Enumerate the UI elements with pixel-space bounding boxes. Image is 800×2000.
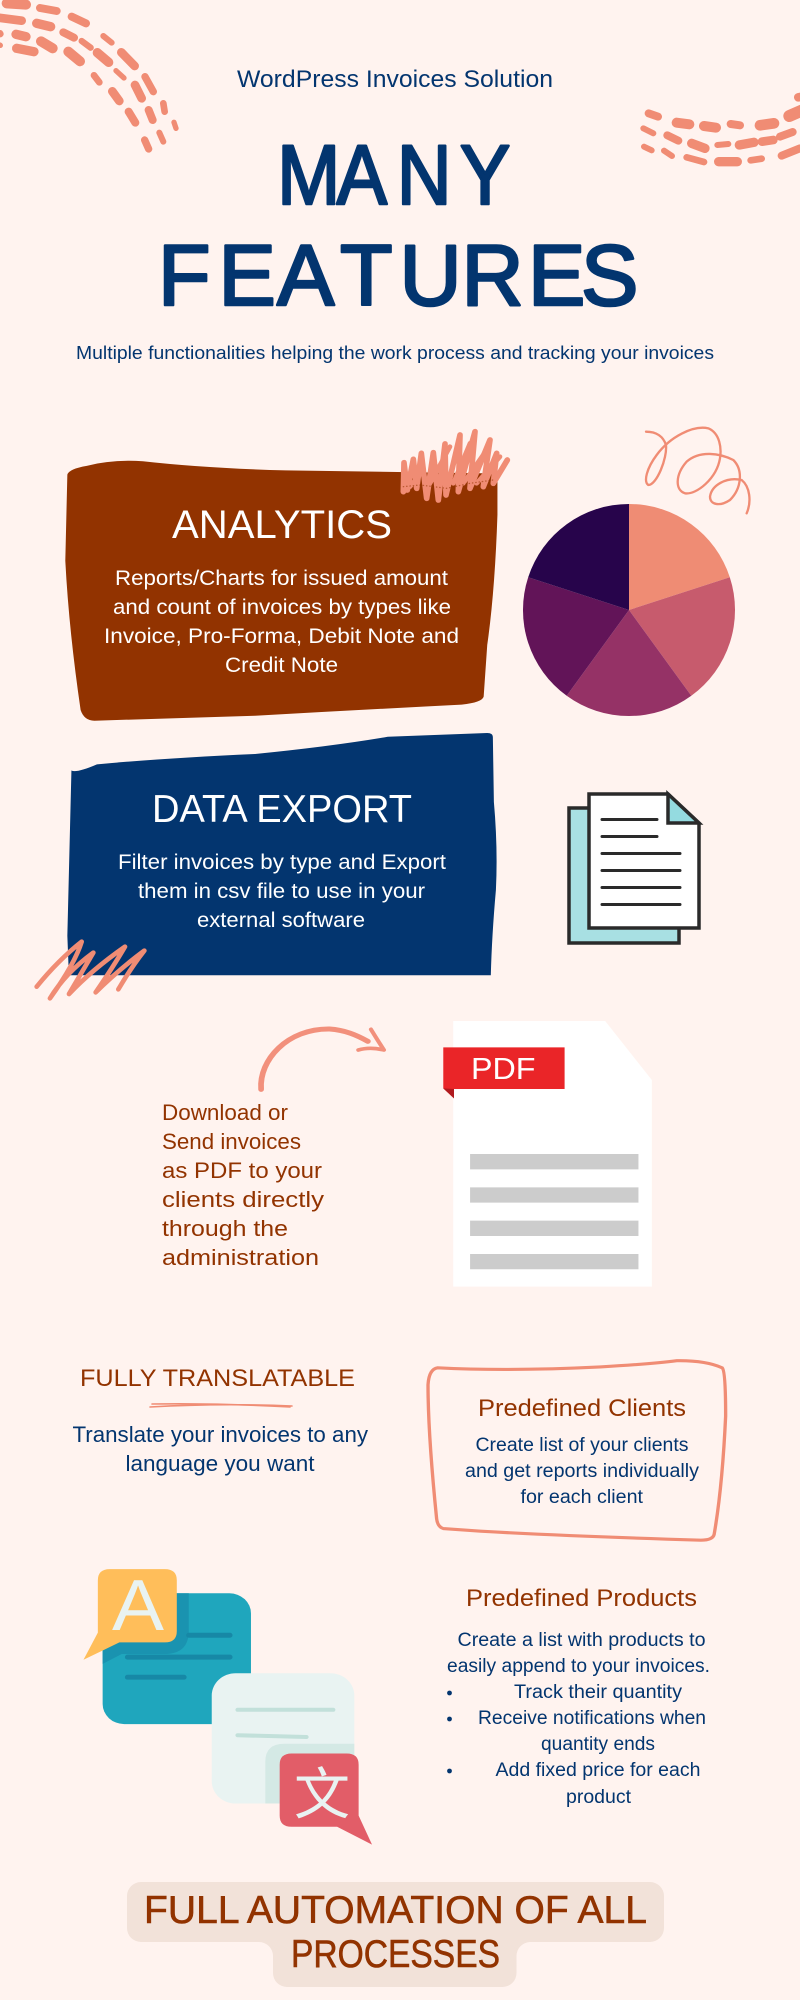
title line: MANY: MANY xyxy=(277,128,510,222)
data export description: external software xyxy=(197,909,365,932)
icon: translation chat bubbles xyxy=(83,1566,372,1845)
heading: fully translatable: FULLY TRANSLATABLE xyxy=(80,1365,355,1392)
heading: analytics: ANALYTICS xyxy=(172,503,392,547)
banner background xyxy=(127,1882,664,1987)
clients description: Create list of your clients xyxy=(476,1435,688,1456)
analytics description: Invoice, Pro-Forma, Debit Note and xyxy=(104,625,459,648)
pie chart xyxy=(523,504,735,716)
title line: FEATURES: FEATURES xyxy=(158,228,638,324)
banner text: FULL AUTOMATION OF ALL xyxy=(144,1889,647,1932)
data export description xyxy=(118,851,446,932)
products description: Receive notifications when xyxy=(478,1708,706,1729)
analytics description: Reports/Charts for issued amount xyxy=(115,567,448,590)
pdf description text xyxy=(162,1100,324,1270)
pdf description text: as PDF to your xyxy=(162,1158,322,1183)
data export description: Filter invoices by type and Export xyxy=(118,851,446,874)
clients outline xyxy=(428,1361,726,1540)
banner text xyxy=(144,1889,647,1976)
pdf description text: clients directly xyxy=(162,1187,324,1212)
subtitle: Multiple functionalities helping the work process and tracking your invoices xyxy=(76,343,714,363)
decoration: scribble on data export panel xyxy=(37,942,144,998)
analytics description: and count of invoices by types like xyxy=(113,596,451,619)
data export text xyxy=(118,788,446,932)
underline stroke xyxy=(150,1404,292,1407)
block: predefined products xyxy=(447,1585,710,1808)
heading: predefined clients: Predefined Clients xyxy=(478,1395,686,1422)
block: fully translatable xyxy=(72,1365,368,1476)
icon: PDF document xyxy=(443,1021,652,1287)
products description: product xyxy=(566,1787,632,1808)
heading: data export: DATA EXPORT xyxy=(152,788,412,831)
clients description: for each client xyxy=(520,1487,644,1508)
eyebrow heading: WordPress Invoices Solution xyxy=(237,66,553,93)
translatable description: Translate your invoices to any xyxy=(72,1422,368,1447)
letter A: A xyxy=(112,1566,164,1646)
arrow: to PDF xyxy=(261,1029,384,1089)
analytics description: Credit Note xyxy=(225,654,338,677)
pdf description text: Download or xyxy=(162,1100,288,1125)
analytics description xyxy=(104,567,459,677)
main title xyxy=(158,128,638,324)
clients description xyxy=(465,1435,700,1508)
data export description: them in csv file to use in your xyxy=(138,880,425,903)
products description: quantity ends xyxy=(541,1734,655,1755)
translatable description xyxy=(72,1422,368,1476)
panel: predefined clients xyxy=(428,1361,726,1540)
products description: Track their quantity xyxy=(514,1682,683,1703)
decoration: top-right dashes xyxy=(643,97,800,162)
decoration: scribble on analytics panel xyxy=(403,432,507,500)
panel: data export background xyxy=(67,733,497,975)
footer banner xyxy=(127,1882,664,1987)
icon: PDF document: PDF xyxy=(471,1051,536,1086)
character wen: 文 xyxy=(294,1750,350,1831)
pdf description text: administration xyxy=(162,1245,319,1270)
products description: Create a list with products to xyxy=(458,1630,706,1651)
products description: easily append to your invoices. xyxy=(447,1656,710,1677)
icon: documents xyxy=(569,794,699,943)
products description: Add fixed price for each xyxy=(496,1760,700,1781)
products description xyxy=(447,1630,710,1808)
pdf description text: through the xyxy=(162,1216,288,1241)
analytics text xyxy=(104,503,459,677)
banner text: PROCESSES xyxy=(291,1933,500,1976)
pdf description text: Send invoices xyxy=(162,1129,301,1154)
panel: analytics background xyxy=(65,461,497,721)
decoration: spiral loop xyxy=(646,428,749,513)
decoration: top-left dashes xyxy=(0,3,176,149)
translatable description: language you want xyxy=(126,1451,314,1476)
heading: predefined products: Predefined Products xyxy=(466,1585,697,1612)
clients description: and get reports individually xyxy=(465,1461,700,1482)
